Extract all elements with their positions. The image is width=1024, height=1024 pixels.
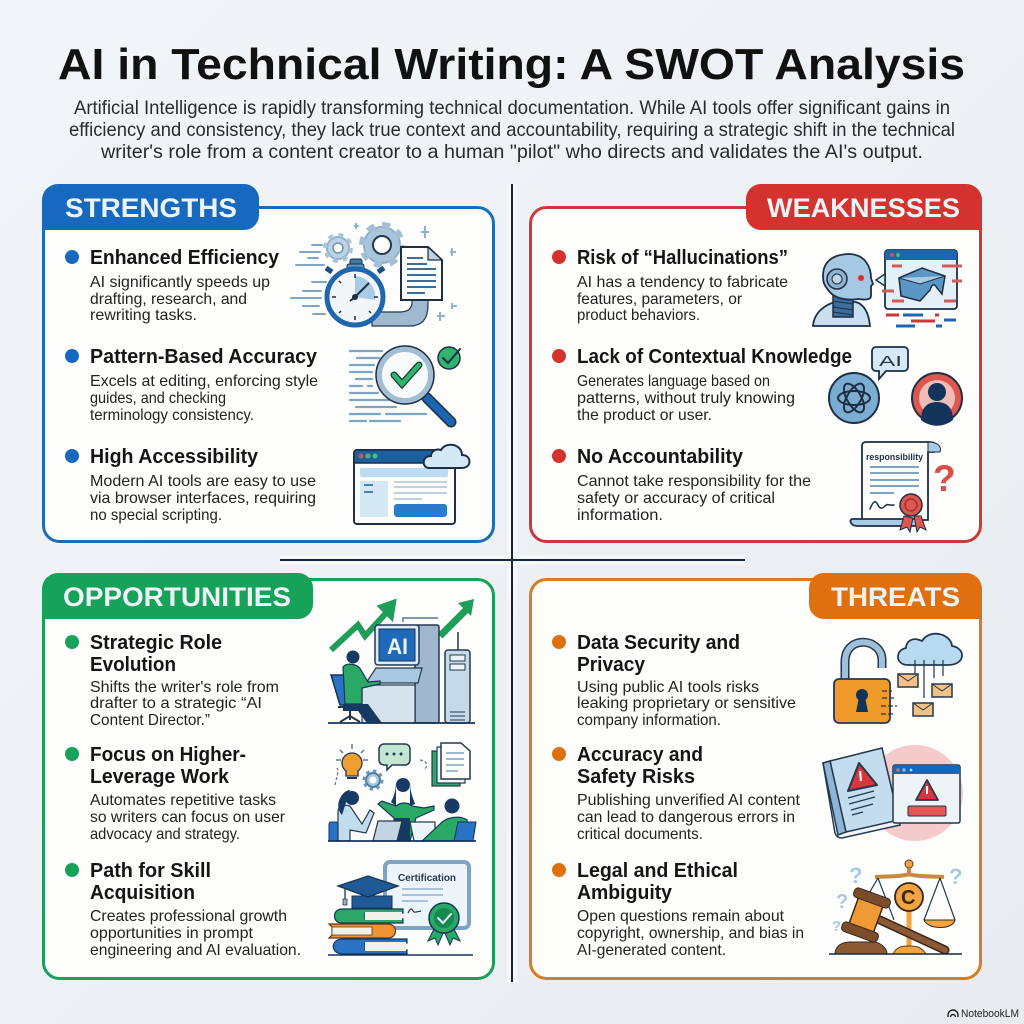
intro paragraph: Artificial Intelligence is rapidly transforming technical documentation. While AI tools offer significant gains in xyxy=(74,97,950,119)
icon: responsibility scroll with ribbon and question mark: responsibility xyxy=(866,452,924,463)
item: no accountability: information. xyxy=(577,507,663,524)
item: high accessibility xyxy=(65,446,316,524)
item: focus on higher-leverage work xyxy=(65,744,286,843)
weaknesses tab: WEAKNESSES xyxy=(767,193,960,223)
icon: open padlock, cloud and envelopes xyxy=(834,634,962,723)
item: legal and ethical ambiguity: Legal and Ethical xyxy=(577,860,738,882)
item: data security and privacy: Data Security and xyxy=(577,632,740,654)
NotebookLM watermark: NotebookLM xyxy=(961,1008,1019,1020)
item: lack of contextual knowledge: patterns, without truly knowing xyxy=(577,390,795,407)
item: risk of hallucinations xyxy=(552,247,788,324)
item: path for skill acquisition: engineering and AI evaluation. xyxy=(90,942,301,959)
icon: certificate, graduation cap and books xyxy=(328,862,473,955)
item: legal and ethical ambiguity: Ambiguity xyxy=(577,882,673,904)
icon: robot and hallucinated UI xyxy=(813,250,962,326)
item: data security and privacy xyxy=(552,632,796,729)
item: strategic role evolution: drafter to a strategic “AI xyxy=(90,695,262,712)
item: no accountability: Cannot take responsibility for the xyxy=(577,473,811,490)
strengths tab xyxy=(42,184,259,230)
icon: responsibility scroll with ribbon and question mark xyxy=(850,442,956,532)
icon: magnifier with checkmark xyxy=(350,346,460,422)
item: enhanced efficiency: rewriting tasks. xyxy=(90,307,197,324)
icon: scales of justice, gavel and copyright: ? xyxy=(832,918,841,935)
item: legal and ethical ambiguity xyxy=(552,860,804,959)
item: accuracy and safety risks xyxy=(552,744,801,843)
item: strategic role evolution: Content Director.” xyxy=(90,712,210,729)
item: accuracy and safety risks: Accuracy and xyxy=(577,744,703,766)
icon: responsibility scroll with ribbon and question mark: ? xyxy=(933,458,956,499)
intro paragraph: efficiency and consistency, they lack true context and accountability, requiring a strategic shift in the technical xyxy=(69,119,955,141)
item: risk of hallucinations: product behaviors. xyxy=(577,307,700,324)
item: data security and privacy: Privacy xyxy=(577,654,646,676)
item: risk of hallucinations: Risk of “Hallucinations” xyxy=(577,247,788,269)
icon: AI speech bubble, neural knot and person: AI xyxy=(879,353,902,370)
item: high accessibility: High Accessibility xyxy=(90,446,259,468)
item: legal and ethical ambiguity: copyright, ownership, and bias in xyxy=(577,925,804,942)
item: lack of contextual knowledge xyxy=(552,346,852,424)
icon: team collaborating with ideas and documents xyxy=(328,743,476,841)
item: enhanced efficiency xyxy=(65,247,280,324)
item: high accessibility: Modern AI tools are easy to use xyxy=(90,473,316,490)
icon: scales of justice, gavel and copyright: C xyxy=(901,887,915,909)
opportunities tab xyxy=(42,573,313,619)
item: no accountability: safety or accuracy of critical xyxy=(577,490,775,507)
icon: scales of justice, gavel and copyright: ? xyxy=(836,891,848,913)
title: AI in Technical Writing: A SWOT Analysis xyxy=(58,40,965,89)
icon: browser window with cloud xyxy=(354,445,470,524)
item: data security and privacy: company information. xyxy=(577,712,721,729)
intro paragraph: writer's role from a content creator to a human "pilot" who directs and validates the AI's output. xyxy=(100,141,923,163)
item: strategic role evolution xyxy=(65,632,279,729)
threats tab xyxy=(809,573,982,619)
item: risk of hallucinations: AI has a tendency to fabricate xyxy=(577,274,788,291)
item: strategic role evolution: Evolution xyxy=(90,654,176,676)
item: legal and ethical ambiguity: Open questions remain about xyxy=(577,908,785,925)
icon: certificate, graduation cap and books: Certification xyxy=(398,873,456,884)
item: data security and privacy: leaking proprietary or sensitive xyxy=(577,695,796,712)
item: focus on higher-leverage work: Leverage Work xyxy=(90,766,230,788)
item: accuracy and safety risks: can lead to dangerous errors in xyxy=(577,809,795,826)
opportunities tab: OPPORTUNITIES xyxy=(63,582,291,612)
item: legal and ethical ambiguity: AI-generated content. xyxy=(577,942,726,959)
item: focus on higher-leverage work: Focus on Higher- xyxy=(90,744,246,766)
item: focus on higher-leverage work: advocacy and strategy. xyxy=(90,826,240,843)
weaknesses tab xyxy=(746,184,982,230)
item: path for skill acquisition: Acquisition xyxy=(90,882,195,904)
item: accuracy and safety risks: critical documents. xyxy=(577,826,703,843)
item: high accessibility: no special scripting. xyxy=(90,507,222,524)
item: lack of contextual knowledge: Lack of Contextual Knowledge xyxy=(577,346,852,368)
item: accuracy and safety risks: Safety Risks xyxy=(577,766,695,788)
item: pattern-based accuracy: guides, and checking xyxy=(90,390,226,407)
quadrant cross divider xyxy=(280,184,745,982)
panel: threats xyxy=(530,573,982,978)
item: strategic role evolution: Strategic Role xyxy=(90,632,222,654)
item: lack of contextual knowledge: Generates language based on xyxy=(577,373,770,390)
item: enhanced efficiency: drafting, research, and xyxy=(90,291,247,308)
item: focus on higher-leverage work: Automates repetitive tasks xyxy=(90,792,276,809)
panel: strengths xyxy=(42,184,494,542)
item: focus on higher-leverage work: so writers can focus on user xyxy=(90,809,286,826)
icon: person at AI terminal with growth arrows: AI xyxy=(387,634,408,659)
icon: stopwatch, gears and document xyxy=(291,223,457,326)
item: path for skill acquisition xyxy=(65,860,301,959)
item: pattern-based accuracy: Pattern-Based Accuracy xyxy=(90,346,318,368)
item: pattern-based accuracy xyxy=(65,346,318,424)
icon: warning book and warning browser xyxy=(823,745,963,841)
icon: scales of justice, gavel and copyright: ? xyxy=(849,863,862,888)
icon: AI speech bubble, neural knot and person xyxy=(829,347,962,426)
threats tab: THREATS xyxy=(831,582,960,612)
item: lack of contextual knowledge: the product or user. xyxy=(577,407,712,424)
intro paragraph xyxy=(69,97,955,163)
panel: opportunities xyxy=(42,573,494,978)
item: no accountability: No Accountability xyxy=(577,446,744,468)
item: path for skill acquisition: Creates professional growth xyxy=(90,908,287,925)
item: path for skill acquisition: opportunities in prompt xyxy=(90,925,254,942)
item: data security and privacy: Using public AI tools risks xyxy=(577,679,759,696)
item: risk of hallucinations: features, parameters, or xyxy=(577,291,743,308)
item: pattern-based accuracy: terminology consistency. xyxy=(90,407,254,424)
item: path for skill acquisition: Path for Skill xyxy=(90,860,211,882)
item: enhanced efficiency: AI significantly speeds up xyxy=(90,274,270,291)
item: strategic role evolution: Shifts the writer's role from xyxy=(90,679,279,696)
item: no accountability xyxy=(552,446,811,524)
panel: weaknesses xyxy=(530,184,982,542)
item: high accessibility: via browser interfaces, requiring xyxy=(90,490,316,507)
icon: scales of justice, gavel and copyright xyxy=(829,860,962,954)
item: enhanced efficiency: Enhanced Efficiency xyxy=(90,247,280,269)
item: pattern-based accuracy: Excels at editing, enforcing style xyxy=(90,373,318,390)
icon: person at AI terminal with growth arrows xyxy=(328,599,475,723)
strengths tab: STRENGTHS xyxy=(65,193,237,223)
item: accuracy and safety risks: Publishing unverified AI content xyxy=(577,792,801,809)
icon: scales of justice, gavel and copyright: ? xyxy=(949,864,962,889)
